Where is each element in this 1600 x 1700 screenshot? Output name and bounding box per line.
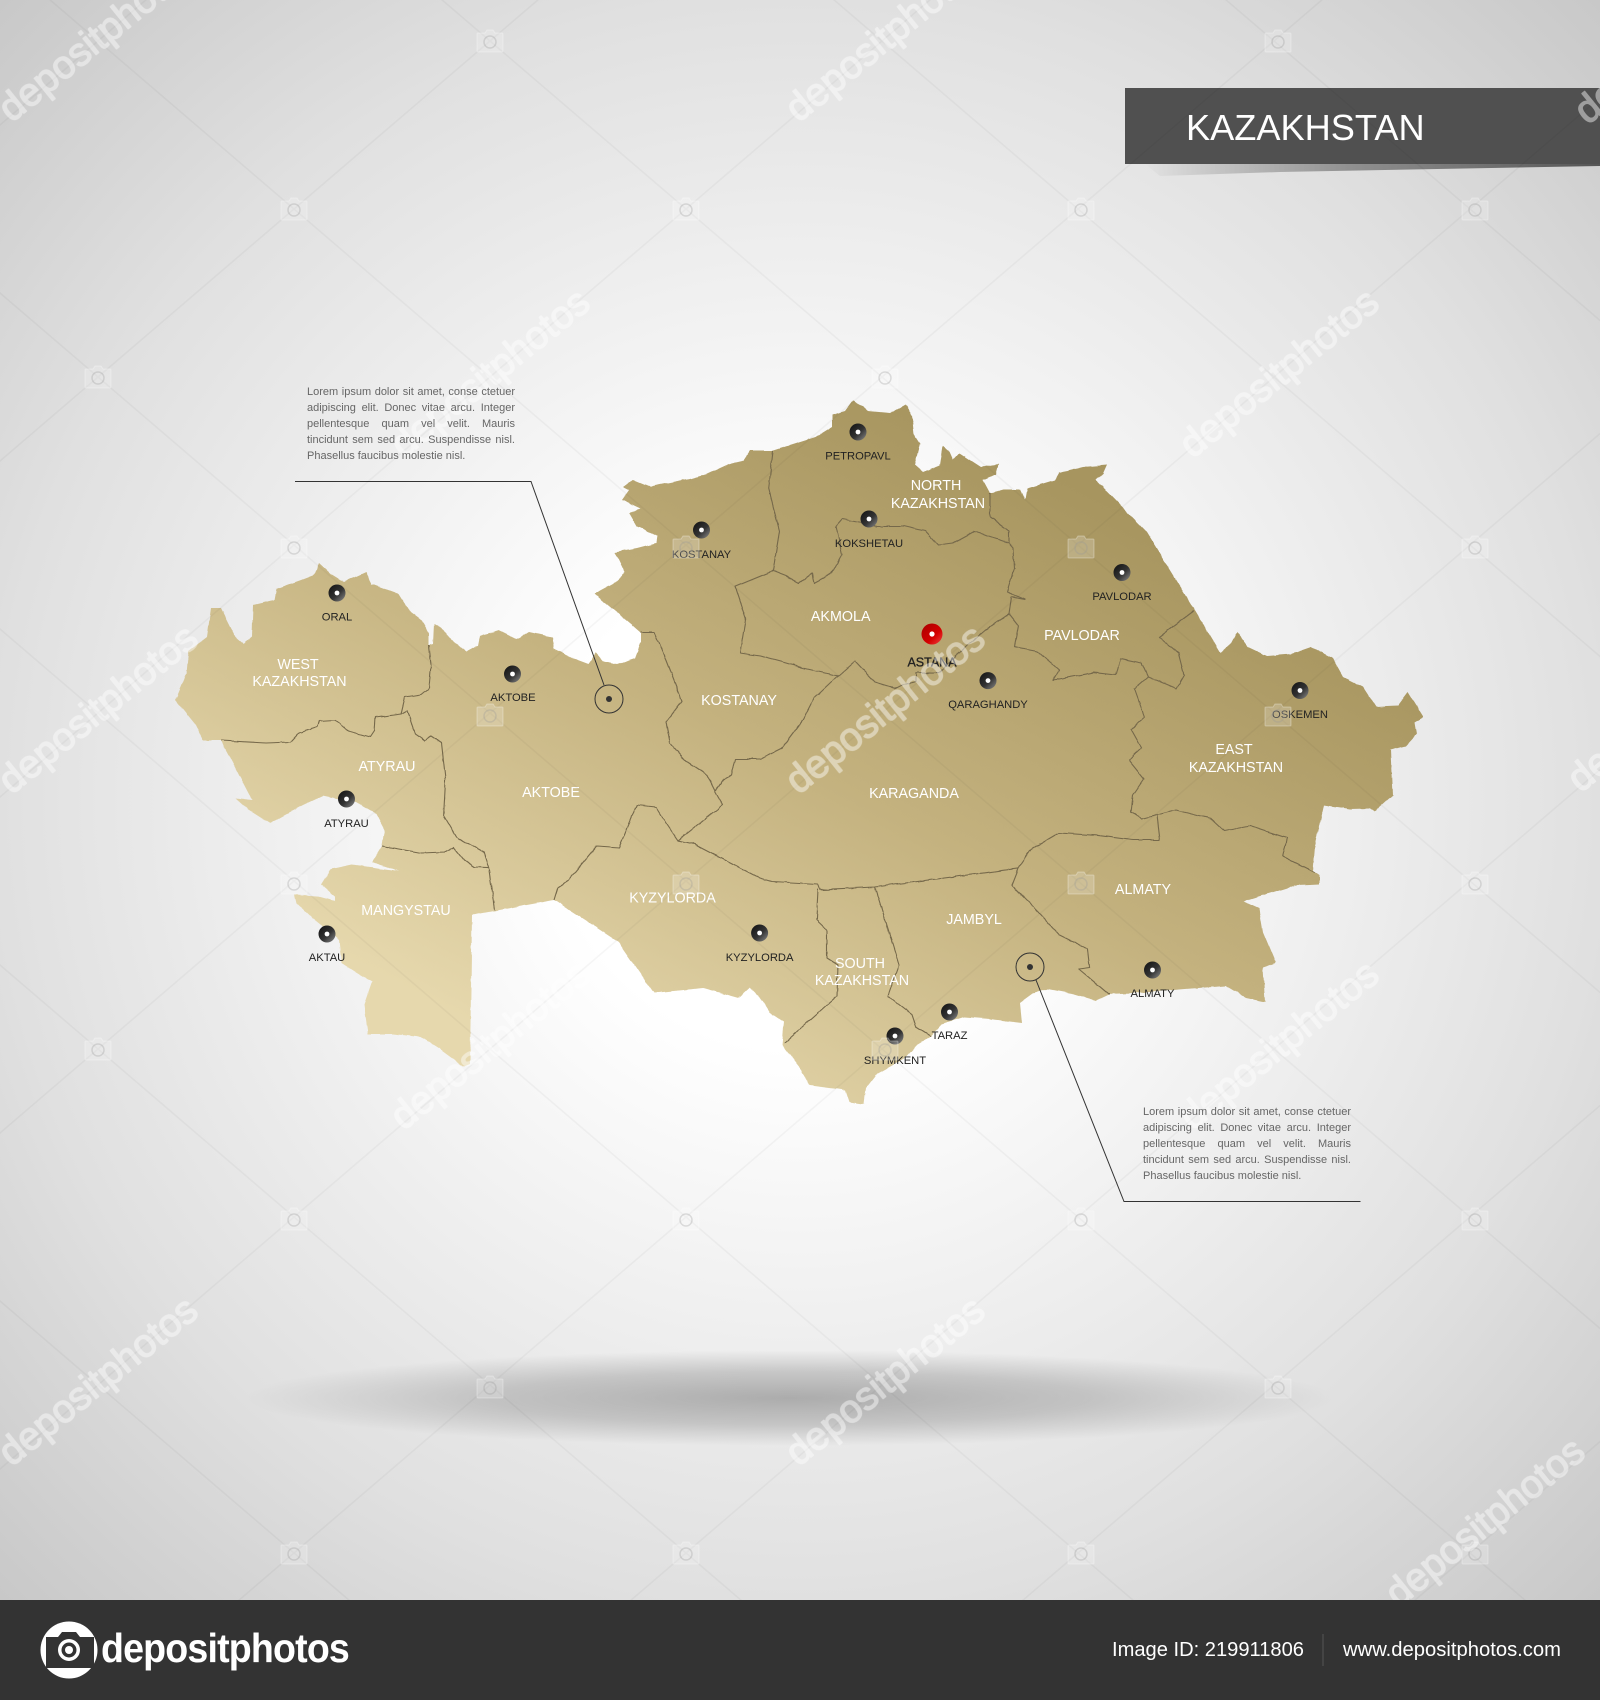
city names: TARAZ	[932, 1030, 968, 1042]
city names: OSKEMEN	[1272, 709, 1328, 721]
diagonal depositphotos watermarks: depositphotos	[1171, 952, 1387, 1138]
region names: NORTH	[911, 478, 961, 494]
region names: ALMATY	[1115, 882, 1172, 898]
region names: PAVLODAR	[1044, 628, 1120, 644]
capital pin: Astana	[922, 624, 942, 644]
callout text: upper left: Lorem ipsum dolor sit amet, conse ctetuer	[307, 386, 515, 398]
callout text: upper left	[307, 386, 515, 462]
callout text: lower right: Phasellus faucibus molestie nisl.	[1143, 1170, 1301, 1182]
city names: ALMATY	[1131, 988, 1175, 1000]
region names: WEST	[277, 657, 319, 673]
city names: PAVLODAR	[1092, 591, 1152, 603]
city names: AKTOBE	[490, 692, 536, 704]
region names	[252, 478, 1283, 989]
region names: KAZAKHSTAN	[1189, 760, 1283, 776]
city names: SHYMKENT	[864, 1055, 926, 1067]
region names: SOUTH	[835, 956, 885, 972]
callout text: upper left: adipiscing elit. Donec vitae arcu. Integer	[307, 402, 515, 414]
callout text: upper left: pellentesque quam vel velit. Mauris	[307, 418, 515, 430]
city names: PETROPAVL	[825, 450, 891, 462]
diagonal depositphotos watermarks: depositphotos	[382, 952, 598, 1138]
callout marker and leader line: lower right	[1016, 953, 1360, 1202]
title banner	[1125, 88, 1600, 176]
region names: KARAGANDA	[869, 786, 959, 802]
diagonal depositphotos watermarks: depositphotos	[777, 1288, 993, 1474]
city names: ORAL	[322, 612, 352, 624]
region names: AKTOBE	[522, 785, 580, 801]
city names: ATYRAU	[324, 818, 369, 830]
diagonal depositphotos watermarks: depositphotos	[1377, 1429, 1593, 1615]
city names: KYZYLORDA	[726, 952, 794, 964]
footer bar	[0, 1600, 1600, 1700]
region names: ATYRAU	[359, 759, 415, 775]
callout text: lower right	[1143, 1106, 1351, 1182]
city names: ASTANA	[907, 656, 957, 670]
city names: QARAGHANDY	[948, 699, 1028, 711]
callout text: upper left: Phasellus faucibus molestie nisl.	[307, 450, 465, 462]
diagonal depositphotos watermarks: depositphotos	[382, 280, 598, 466]
region names: AKMOLA	[811, 609, 871, 625]
country silhouette and region borders	[176, 400, 1424, 1104]
callout text: upper left: tincidunt sem sed arcu. Suspendisse nisl.	[307, 434, 515, 446]
region names: EAST	[1215, 742, 1253, 758]
watermark camera icons	[85, 30, 1488, 1564]
footer logo	[40, 1622, 349, 1678]
city names: KOKSHETAU	[835, 538, 903, 550]
callout text: lower right: Lorem ipsum dolor sit amet, conse ctetuer	[1143, 1106, 1351, 1118]
map of Kazakhstan	[176, 400, 1424, 1104]
region names: KAZAKHSTAN	[891, 496, 985, 512]
callout text: lower right: tincidunt sem sed arcu. Suspendisse nisl.	[1143, 1154, 1351, 1166]
region names: KAZAKHSTAN	[252, 674, 347, 690]
footer website: www.depositphotos.com	[1342, 1639, 1561, 1661]
banner under-shadow	[1145, 164, 1600, 176]
callout marker and leader line: upper left	[295, 482, 623, 713]
map floor shadow	[245, 1350, 1335, 1446]
city pins	[318, 424, 1308, 1044]
logo wordmark: depositphotos	[101, 1625, 349, 1671]
region names: KAZAKHSTAN	[815, 973, 909, 989]
region names: KOSTANAY	[701, 693, 777, 709]
city names: KOSTANAY	[672, 549, 732, 561]
region names: MANGYSTAU	[361, 903, 451, 919]
city names	[309, 450, 1328, 1067]
diagonal depositphotos watermarks: depositphotos	[1171, 280, 1387, 466]
region names: KYZYLORDA	[629, 890, 716, 906]
city names: AKTAU	[309, 952, 345, 964]
footer divider	[1322, 1634, 1324, 1666]
title: KAZAKHSTAN	[1186, 107, 1425, 148]
region names: JAMBYL	[946, 912, 1002, 928]
footer image id: Image ID: 219911806	[1112, 1639, 1304, 1661]
icon: camera badge	[40, 1622, 98, 1678]
diagonal depositphotos watermarks: depositphotos	[777, 616, 993, 802]
callout text: lower right: pellentesque quam vel velit. Mauris	[1143, 1138, 1351, 1150]
callout text: lower right: adipiscing elit. Donec vitae arcu. Integer	[1143, 1122, 1351, 1134]
